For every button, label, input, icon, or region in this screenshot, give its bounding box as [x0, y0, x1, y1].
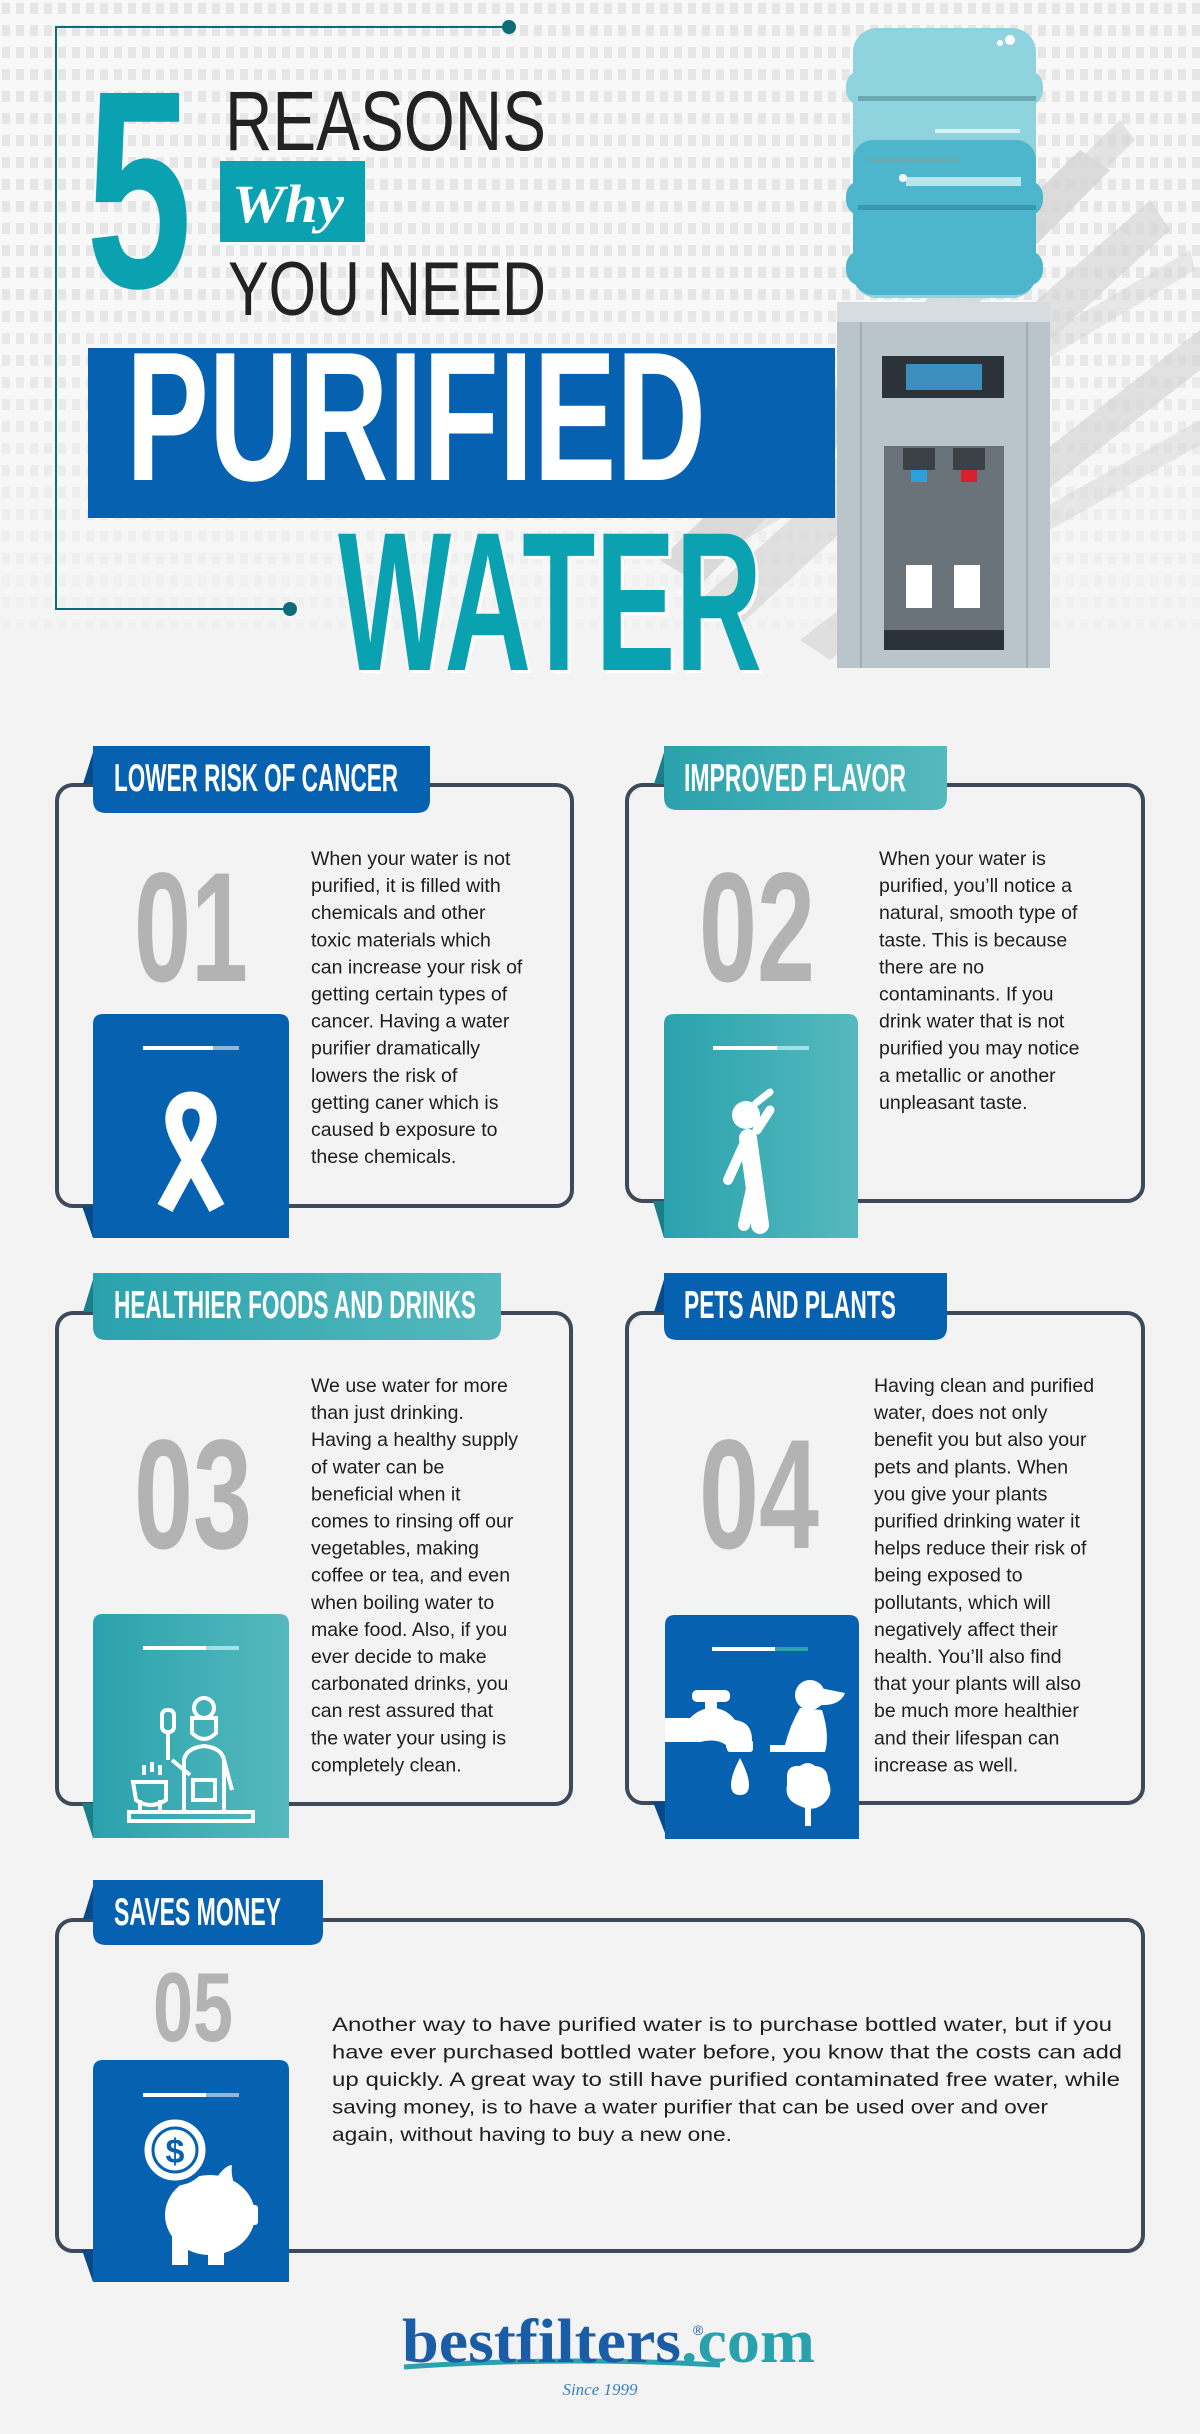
logo: bestfilters.com: Since 1999 [562, 2380, 638, 2399]
title: 5 reasons why you need purified water: WATER [338, 491, 762, 712]
text block: Another way to have purified water is to purchase bottled water, but if you [332, 2014, 1112, 2036]
text block: and their lifespan can [874, 1727, 1059, 1749]
number 03: 03 [134, 1408, 252, 1582]
text block: beneficial when it [311, 1483, 461, 1505]
text block: than just drinking. [311, 1402, 464, 1424]
panel: 01 lower risk of cancer [57, 746, 572, 1238]
text block: purified, it is filled with [311, 875, 501, 897]
title: 5 reasons why you need purified water [86, 32, 835, 715]
icon: person drinking [653, 1014, 858, 1238]
header tab: improved flavor [654, 746, 947, 810]
text block: health. You’ll also find [874, 1646, 1062, 1668]
text block: completely clean. [311, 1754, 462, 1776]
title: 5 reasons why you need purified water: WATER [341, 494, 765, 715]
title frame line [56, 20, 516, 616]
icon: tap, dog and tree [653, 1615, 859, 1839]
text block: When your water is not [311, 848, 511, 870]
text block: natural, smooth type of [879, 902, 1078, 924]
text block: Having a healthy supply [311, 1429, 518, 1451]
text block: We use water for more [311, 1375, 508, 1397]
text block: pets and plants. When [874, 1456, 1068, 1478]
text block: increase as well. [874, 1754, 1018, 1776]
panel: 05 saves money [57, 1880, 1143, 2282]
text block: chemicals and other [311, 902, 486, 924]
text block: comes to rinsing off our [311, 1510, 514, 1532]
icon: chef cooking [82, 1614, 289, 1838]
number 05: 05 [153, 1952, 233, 2062]
text block: Having clean and purified [874, 1375, 1094, 1397]
text block: drink water that is not [879, 1011, 1065, 1033]
header tab: pets and plants [654, 1273, 947, 1340]
text block: water, does not only [873, 1402, 1048, 1424]
text block: helps reduce their risk of [874, 1538, 1087, 1560]
text block: you give your plants [874, 1483, 1048, 1505]
decorative brush strokes [660, 120, 1200, 660]
header tab: healthier foods and drinks [83, 1273, 501, 1340]
text block: carbonated drinks, you [311, 1673, 508, 1695]
text block: contaminants. If you [879, 984, 1054, 1006]
text block: unpleasant taste. [879, 1092, 1028, 1114]
text block: purified you may notice [879, 1038, 1080, 1060]
text block: purified drinking water it [874, 1510, 1081, 1532]
text block: lowers the risk of [311, 1065, 458, 1087]
text block: benefit you but also your [874, 1429, 1087, 1451]
text block: getting caner which is [311, 1092, 499, 1114]
title: 5 reasons why you need purified water: PURIFIED [126, 313, 706, 519]
text block: when boiling water to [310, 1592, 494, 1614]
text block: When your water is [879, 848, 1046, 870]
title: 5 reasons why you need purified water: REASONS [225, 74, 546, 168]
icon: ribbon [82, 1014, 289, 1238]
title: 5 reasons why you need purified water: YOU NEED [228, 247, 546, 332]
water cooler illustration [837, 28, 1050, 668]
text block: saving money, is to have a water purifier that can be used over and over [332, 2096, 1049, 2118]
number 01: 01 [134, 841, 248, 1015]
text block: have ever purchased bottled water before, you know that the costs can add [332, 2042, 1122, 2064]
text block: caused b exposure to [311, 1119, 498, 1141]
text block: can increase your risk of [311, 956, 523, 978]
header tab: saves money: SAVES MONEY [114, 1891, 281, 1934]
title: 5 reasons why you need purified water: 5 [86, 32, 192, 347]
text block: the water your using is [311, 1727, 506, 1749]
text block: coffee or tea, and even [311, 1565, 510, 1587]
logo: bestfilters.com: bestfilters .com [402, 2308, 815, 2376]
panel: 02 improved flavor [627, 746, 1143, 1238]
text block: a metallic or another [879, 1065, 1056, 1087]
text block: these chemicals. [311, 1146, 456, 1168]
text block: make food. Also, if you [311, 1619, 507, 1641]
header tab: lower risk of cancer: LOWER RISK OF CANCER [114, 757, 398, 800]
text block: being exposed to [874, 1565, 1023, 1587]
text block: toxic materials which [311, 929, 491, 951]
text block: up quickly. A great way to still have purified contaminated free water, while [332, 2069, 1120, 2091]
header tab: saves money [83, 1880, 323, 1945]
text block: cancer. Having a water [311, 1011, 510, 1033]
header tab: healthier foods and drinks: HEALTHIER FOODS AND DRINKS [114, 1284, 476, 1327]
text block: can rest assured that [311, 1700, 494, 1722]
icon: piggy bank with coin: $ [166, 2133, 185, 2171]
text block: pollutants, which will [874, 1592, 1051, 1614]
text block: taste. This is because [879, 929, 1067, 951]
number 02: 02 [699, 841, 815, 1015]
number 04: 04 [699, 1408, 819, 1582]
text block: be much more healthier [874, 1700, 1079, 1722]
text block: again, without having to buy a new one. [332, 2124, 732, 2146]
panel: 04 pets and plants [627, 1273, 1143, 1839]
text block: negatively affect their [874, 1619, 1058, 1641]
text block: getting certain types of [311, 984, 508, 1006]
panel: 03 healthier foods and drinks [57, 1273, 571, 1838]
icon: piggy bank with coin [82, 2060, 289, 2282]
text block: purifier dramatically [311, 1038, 480, 1060]
text block: purified, you’ll notice a [879, 875, 1072, 897]
text block: there are no [879, 956, 984, 978]
title: 5 reasons why you need purified water: Why [232, 174, 345, 234]
header tab: pets and plants: PETS AND PLANTS [684, 1284, 896, 1327]
text block: vegetables, making [311, 1538, 479, 1560]
logo: bestfilters.com: ® [693, 2322, 704, 2338]
text block: ever decide to make [311, 1646, 487, 1668]
text block: that your plants will also [874, 1673, 1081, 1695]
header tab: lower risk of cancer [83, 746, 430, 813]
text block: of water can be [311, 1456, 444, 1478]
header tab: improved flavor: IMPROVED FLAVOR [684, 757, 906, 800]
